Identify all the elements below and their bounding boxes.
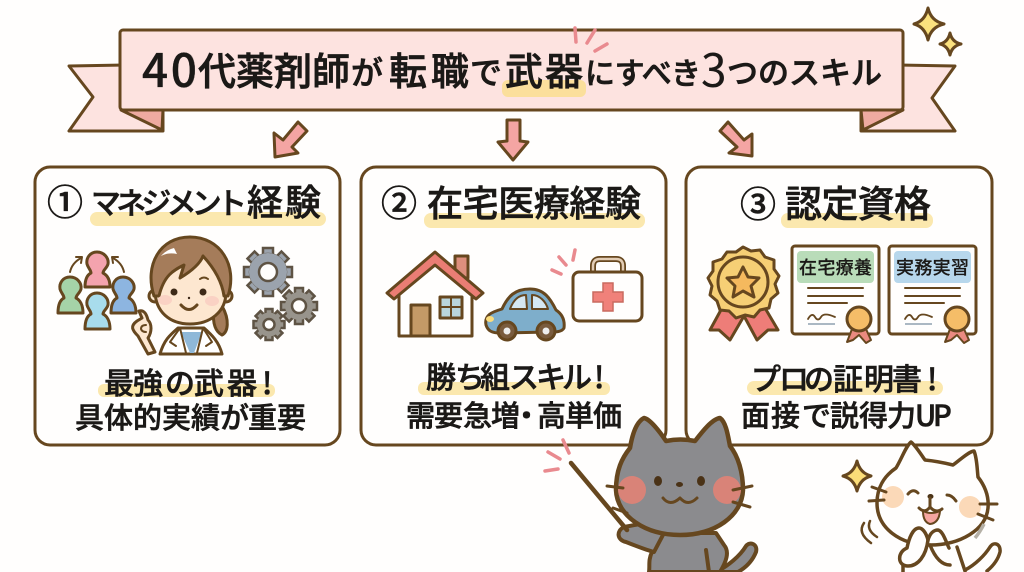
white cat tail	[965, 544, 1000, 571]
panel 1 heading: 経験	[247, 174, 321, 226]
white cat whiskers	[869, 487, 997, 520]
certificate: practical training: 実務実習	[896, 254, 969, 280]
panel 1 body text line 2: 具体的実績が重要	[75, 395, 306, 437]
pointer stick	[571, 463, 627, 530]
panel 3 body text line 1: プロの証明書!	[751, 355, 937, 399]
panel 3 body text line 2: 面接で説得力UP	[741, 393, 952, 435]
panel: home healthcare experience	[361, 167, 666, 445]
arrow: to panel 3	[720, 122, 752, 156]
banner left tail	[69, 65, 163, 131]
white cat eyes	[908, 491, 956, 501]
certificate: practical training	[889, 246, 976, 343]
panel 2 body text line 2: 需要急増・高単価	[406, 393, 622, 435]
small gear	[254, 309, 284, 340]
sparkles top right	[914, 8, 961, 55]
panel 1 heading: ①	[47, 174, 83, 226]
title text: 武器	[505, 41, 583, 96]
white cat	[869, 442, 1000, 572]
icon: car	[486, 289, 564, 340]
icon: house	[387, 252, 483, 336]
panel 2 frame	[361, 167, 666, 445]
title text: が	[351, 48, 383, 94]
panel 3 frame	[686, 167, 992, 445]
gray cat raised arm	[619, 524, 664, 552]
banner right fold	[861, 110, 903, 130]
motion lines by white cat	[862, 521, 877, 543]
panel 3 text highlight	[747, 381, 943, 395]
panel 1 text highlight	[98, 384, 275, 397]
panel 2 heading: 在宅医療経験	[427, 175, 641, 227]
panel 3 heading highlight	[781, 213, 933, 228]
title text: で	[470, 48, 502, 94]
white cat mouth	[923, 511, 940, 524]
panel: management experience	[35, 167, 340, 445]
gray cat eyes	[654, 476, 662, 486]
gray cat with pointer	[571, 418, 756, 572]
arrow: to panel 1	[274, 122, 307, 157]
gray cat tail	[716, 544, 756, 572]
title text: 3	[701, 35, 727, 101]
certificate: home care: 在宅療養	[799, 254, 872, 280]
icon: emphasis marks	[552, 250, 575, 274]
big gear	[244, 248, 292, 296]
title text: 転職	[389, 41, 469, 96]
panel 1 heading highlight	[90, 212, 326, 226]
title text: つのスキル	[727, 48, 882, 93]
banner left fold	[121, 110, 163, 130]
gray cat inner arm line	[706, 550, 709, 572]
panel: certifications	[686, 167, 992, 445]
banner right tail	[861, 65, 955, 131]
emphasis marks near pointer	[545, 440, 569, 471]
title text: 代薬剤師	[198, 41, 350, 96]
icon: pharmacist woman	[133, 237, 232, 354]
icon: medal	[708, 247, 779, 340]
panel 2 body text line 1: 勝ち組スキル!	[426, 353, 604, 397]
icon: medical kit	[573, 259, 642, 321]
banner main	[120, 30, 903, 110]
gray cat mouth	[663, 498, 697, 502]
title highlight	[502, 80, 586, 97]
title text: 40	[142, 35, 197, 101]
title banner	[69, 30, 955, 131]
gray cat head	[616, 418, 743, 535]
emphasis marks above title	[575, 28, 607, 51]
white cat head	[877, 442, 988, 545]
panel 3 heading: ③	[740, 176, 776, 228]
panel 2 heading highlight	[424, 213, 645, 228]
icon: gears	[244, 248, 317, 340]
white cat left paw	[900, 528, 928, 566]
medium gear	[281, 288, 317, 324]
gray cat nose	[676, 482, 683, 487]
white cat nose	[928, 494, 934, 499]
gray cat cheeks	[618, 476, 646, 504]
gray cat body	[649, 533, 727, 572]
panel 1 body text line 1: 最強の武器!	[104, 359, 272, 403]
arrow: to panel 2	[498, 120, 528, 160]
panel 1 heading: マネジメント	[91, 179, 247, 223]
icon: team people	[58, 252, 136, 329]
panel 1 frame	[35, 167, 340, 445]
title text: にすべき	[585, 49, 701, 93]
white cat body lines	[903, 547, 965, 572]
panel 2 text highlight	[418, 382, 610, 395]
white cat right paw	[928, 530, 950, 565]
panel 3 heading: 認定資格	[785, 174, 931, 228]
white cat cheeks	[882, 486, 904, 508]
gray cat whiskers	[607, 486, 752, 513]
white cat head shading	[975, 524, 984, 538]
sparkle by white cat	[843, 461, 871, 491]
certificate: home care	[792, 246, 879, 343]
panel 2 heading: ②	[381, 175, 417, 227]
